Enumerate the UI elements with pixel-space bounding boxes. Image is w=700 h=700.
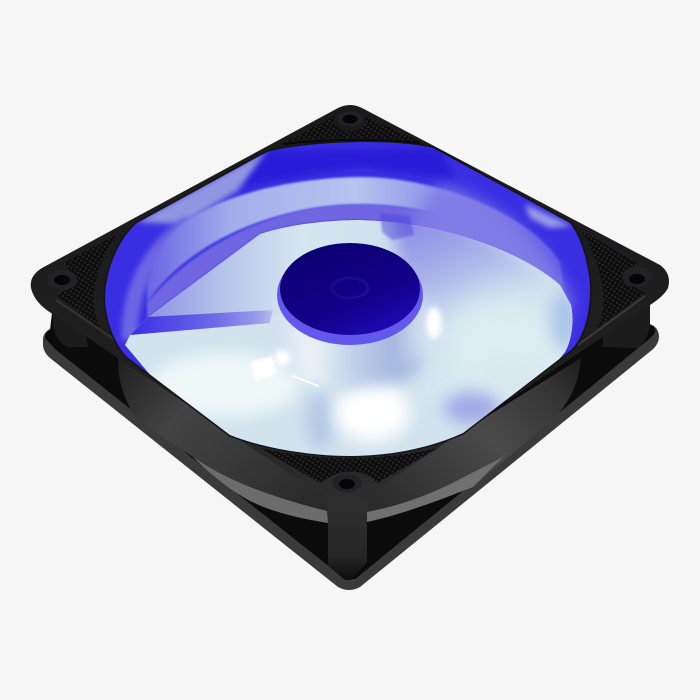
duct top dark patch — [240, 148, 455, 187]
corner pad: left — [57, 233, 120, 328]
light arc band — [147, 177, 565, 303]
mounting holes — [47, 112, 652, 492]
opening rim shadow — [105, 142, 590, 456]
corner pad: top — [283, 116, 420, 144]
shade: between blades — [306, 390, 334, 450]
glow: bottom blade — [334, 382, 410, 442]
hub rim — [277, 245, 423, 345]
shade near hub — [376, 344, 420, 380]
reflection streak — [293, 376, 318, 386]
right blade side wedge — [345, 358, 581, 522]
lower frame plate — [43, 324, 659, 590]
right edge tint — [551, 290, 579, 350]
fan body between frames — [50, 300, 650, 580]
blue duct wall — [100, 135, 600, 465]
body shadow block — [50, 300, 650, 579]
glow: right lower — [504, 370, 546, 402]
illustration: blue LED case fan — [30, 105, 669, 590]
hub — [251, 243, 442, 388]
left blade side wedge — [118, 358, 345, 520]
base pale field — [125, 220, 572, 456]
lavender patch — [444, 392, 500, 424]
glowing fan opening — [100, 135, 600, 470]
right corner pillar — [603, 305, 650, 348]
impeller lit area — [125, 220, 572, 456]
right lavender wash — [410, 185, 572, 340]
white highlight on hub — [426, 307, 442, 339]
glow: right blade — [450, 296, 554, 372]
left blade lit edge — [193, 457, 328, 523]
left inner ring stripe — [130, 222, 190, 340]
strut — [130, 310, 273, 335]
duct light patch upper left — [137, 150, 267, 224]
blade right field — [390, 205, 585, 400]
bracket detail — [380, 213, 414, 240]
corner pad: bottom — [260, 448, 438, 483]
frame lower bevel highlights — [56, 296, 645, 350]
hub cup — [280, 243, 420, 335]
hub logo hint — [332, 278, 368, 298]
right blade lit edge — [367, 457, 503, 522]
front corner pillar — [328, 500, 367, 580]
white spot: small — [274, 350, 290, 366]
duct light patch upper right — [525, 204, 572, 228]
glow: lower left blade — [150, 353, 300, 417]
top frame surface — [31, 105, 669, 505]
hub wall — [273, 295, 427, 388]
purple arc band — [146, 202, 428, 318]
corner pad: right — [580, 230, 645, 328]
white spot: left — [251, 356, 277, 381]
left corner pillar — [53, 310, 88, 347]
blade left pale — [147, 221, 400, 320]
